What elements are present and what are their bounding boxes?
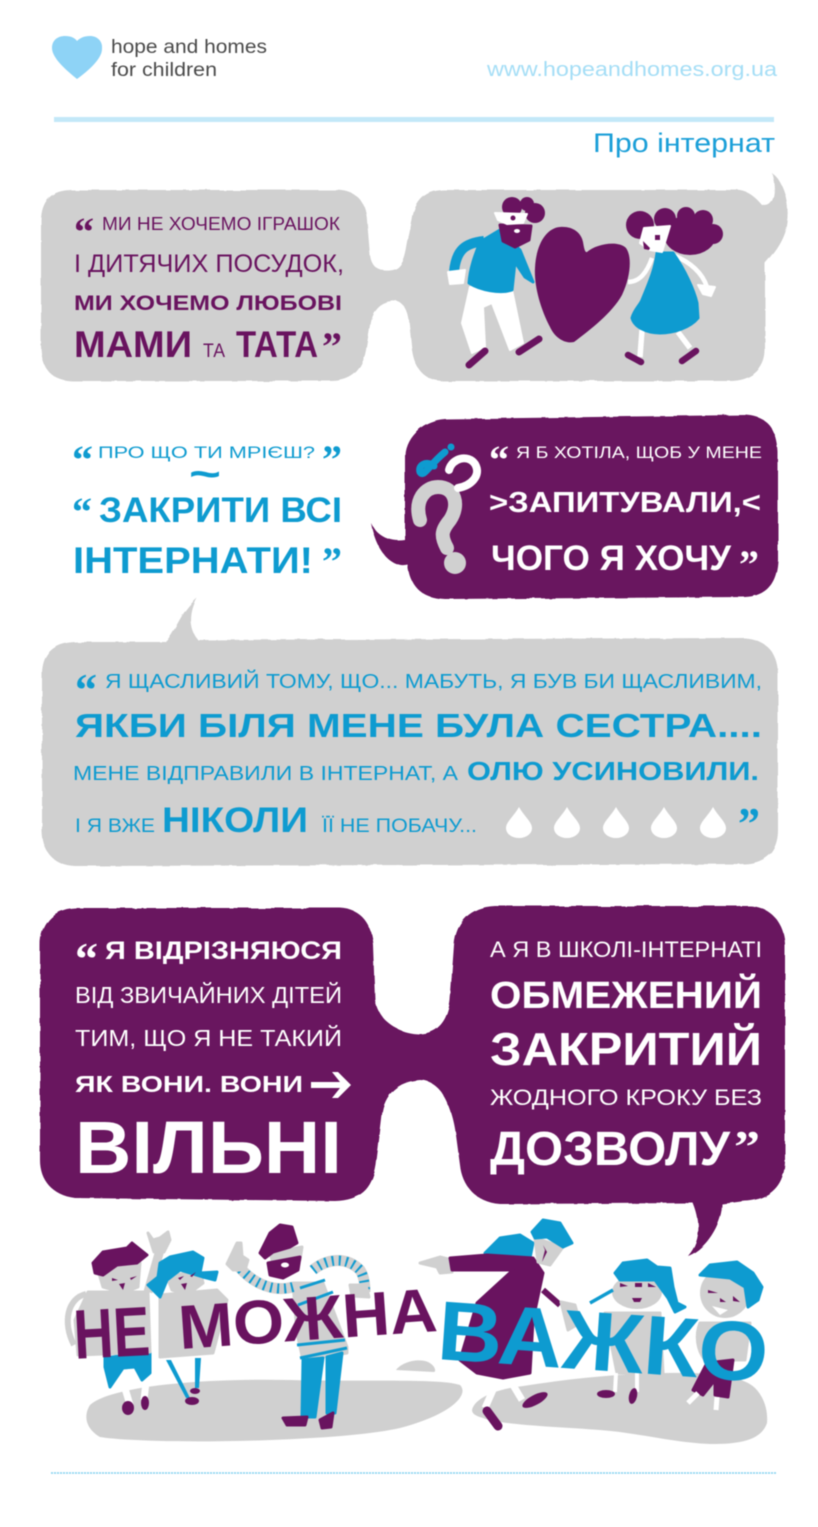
panel: dream quote text (72, 437, 342, 584)
left quote text: ВІД ЗВИЧАЙНИХ ДІТЕЙ (75, 981, 342, 1008)
panel: love quote (41, 173, 788, 381)
quote text: НІКОЛИ (162, 801, 308, 840)
left quote text: ЯК ВОНИ. ВОНИ (75, 1071, 303, 1097)
quote text: МИ ХОЧЕМО ЛЮБОВІ (74, 292, 342, 315)
icon: question marks (418, 444, 477, 574)
panel: dream quote text: “ (72, 437, 93, 482)
man with striped sweater (227, 1225, 369, 1428)
panel: dream quote text: ” (322, 539, 342, 584)
right quote text: ЗАКРИТИЙ (490, 1023, 762, 1075)
boy (688, 1262, 762, 1410)
panel: dream quote text: “ (72, 489, 92, 534)
website url: www.hopeandhomes.org.ua (486, 59, 778, 81)
right quote text: А Я В ШКОЛІ-ІНТЕРНАТІ (490, 937, 762, 962)
quote text: МАМИ (74, 324, 192, 365)
left quote text: Я ВІДРІЗНЯЮСЯ (105, 937, 342, 965)
word: НЕ: НЕ (72, 1292, 152, 1374)
quote text: “ (74, 209, 94, 254)
panel: dream quote text: ІНТЕРНАТИ! (73, 540, 313, 581)
quote text: І Я ВЖЕ (75, 816, 155, 837)
quote text (73, 664, 762, 849)
quote text: МЕНЕ ВІДПРАВИЛИ В ІНТЕРНАТ, А (73, 763, 459, 785)
trousers (462, 287, 523, 353)
panel: asked quote (371, 415, 778, 599)
quote text: ТАТА (236, 324, 318, 365)
heart (535, 227, 630, 342)
teacher (420, 1220, 580, 1426)
sweater (469, 230, 533, 292)
right quote text: ЖОДНОГО КРОКУ БЕЗ (490, 1085, 762, 1110)
panel: dream quote text: ” (322, 437, 342, 482)
logo wordmark: hope and homes (111, 37, 267, 58)
quote text: І ДИТЯЧИХ ПОСУДОК, (74, 250, 344, 278)
quote text: ОЛЮ УСИНОВИЛИ. (467, 756, 759, 786)
panel: dream quote text: ЗАКРИТИ ВСІ (99, 491, 342, 530)
kid 1 (68, 1232, 170, 1415)
quote text (489, 437, 762, 587)
father (448, 197, 545, 365)
panel: free vs restricted quote (40, 906, 785, 1256)
quote text: ТА (203, 341, 225, 362)
quote text: МИ НЕ ХОЧЕМО ІГРАШОК (102, 214, 341, 234)
grey speech bubble (42, 598, 778, 866)
word: ВАЖКО: ВАЖКО (435, 1283, 771, 1400)
ground shadows (86, 1360, 767, 1444)
grey double speech bubble (41, 173, 788, 381)
word: МОЖНА: МОЖНА (176, 1276, 439, 1363)
quote text: “ (489, 437, 509, 482)
panel: dream quote text: ПРО ЩО ТИ МРІЄШ? (98, 443, 315, 462)
quote text: ” (322, 324, 342, 369)
purple double speech bubble (40, 906, 785, 1256)
left quote text: ТИМ, ЩО Я НЕ ТАКИЙ (75, 1024, 342, 1051)
left quote text: “ (75, 933, 98, 984)
purple speech bubble (371, 415, 778, 599)
right quote text: ДОЗВОЛУ (490, 1123, 731, 1176)
right quote text (490, 937, 762, 1176)
illustration: father and daughter with heart (448, 197, 723, 365)
quote text: ЇЇ НЕ ПОБАЧУ... (322, 816, 477, 837)
section heading: Про інтернат (593, 128, 775, 158)
daughter (626, 207, 723, 362)
quote text: Я Б ХОТІЛА, ЩОБ У МЕНЕ (516, 443, 762, 462)
logo wordmark (111, 37, 267, 81)
right quote text: ” (734, 1121, 760, 1172)
quote text: >ЗАПИТУВАЛИ,< (489, 487, 761, 519)
illustration: children and adults with words (68, 1220, 771, 1444)
icon: heart (52, 36, 102, 79)
quote text: ЯКБИ БІЛЯ МЕНЕ БУЛА СЕСТРА.... (75, 707, 762, 744)
right quote text: ОБМЕЖЕНИЙ (490, 972, 762, 1017)
quote text (74, 209, 344, 369)
logo wordmark: for children (111, 60, 217, 81)
icon: tear drops (506, 807, 726, 838)
quote text: ЧОГО Я ХОЧУ (491, 539, 732, 578)
quote text: ” (739, 542, 759, 587)
logo: hope and homes for children (52, 36, 267, 81)
girl with pigtails (590, 1260, 685, 1405)
panel: sister quote (42, 598, 778, 866)
tilde: ~ (189, 450, 221, 497)
left quote text (75, 933, 351, 1189)
quote text: Я ЩАСЛИВИЙ ТОМУ, ЩО... МАБУТЬ, Я БУВ БИ ЩАСЛИВИМ, (105, 669, 762, 693)
kid 2 (148, 1252, 227, 1405)
quote text: “ (75, 664, 97, 715)
left quote text: ВІЛЬНІ (75, 1106, 342, 1189)
quote text: ” (738, 798, 760, 849)
head (502, 197, 545, 223)
arrow (311, 1072, 351, 1098)
